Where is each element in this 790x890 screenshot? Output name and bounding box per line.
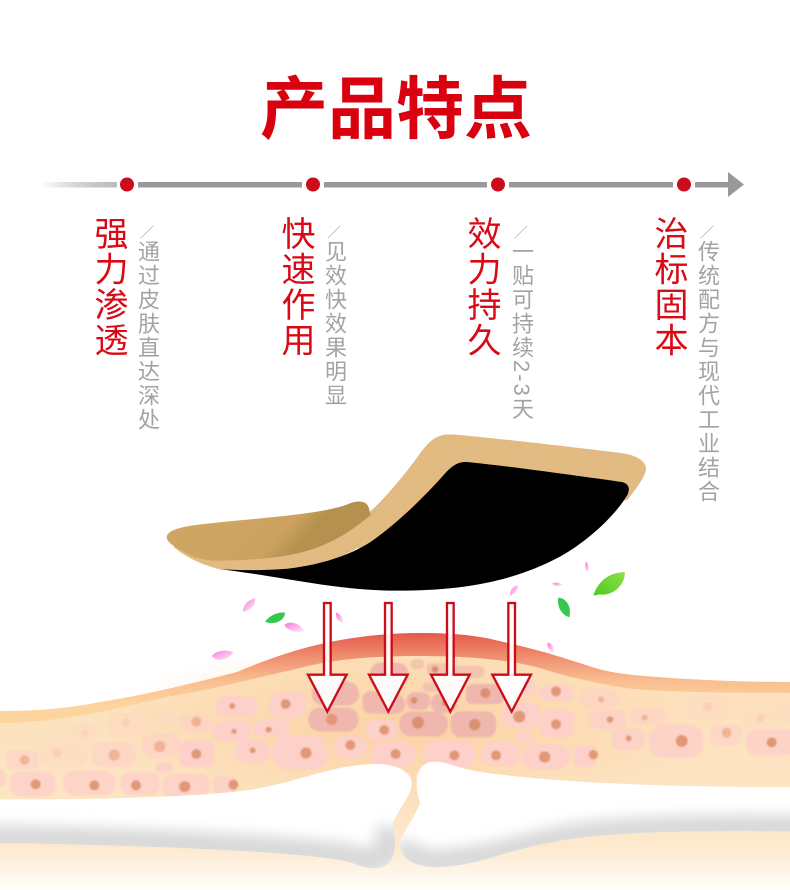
patch backing [173, 434, 646, 571]
medicated patch [167, 434, 646, 591]
skin surface layer [0, 633, 790, 723]
bone, left [0, 760, 417, 873]
arrow 1 [308, 603, 347, 712]
arrow 3 [431, 603, 470, 712]
feature 3 description: ／ 一贴可持续2-3天 [509, 225, 534, 422]
feature 1 heading: 强力渗透 [89, 216, 127, 358]
feature 3 heading: 效力持久 [462, 216, 500, 358]
skin cells, right half [370, 659, 790, 769]
patch folded corner [167, 501, 371, 561]
bone, right [390, 757, 790, 870]
patch black medicine surface [218, 462, 629, 591]
timeline arrow [40, 172, 744, 197]
arrow 2 [369, 603, 408, 712]
arrow 4 [492, 603, 531, 712]
floating petals and leaves [212, 562, 625, 660]
title: 产品特点 [260, 72, 532, 148]
feature 4 description: ／ 传统配方与现代工业结合 [695, 225, 720, 504]
feature 4 heading: 治标固本 [649, 216, 687, 358]
skin cells, left half [0, 682, 403, 799]
feature 2 heading: 快速作用 [276, 216, 314, 358]
four downward red arrows [308, 603, 531, 712]
skin body [0, 649, 790, 890]
feature 1 description: ／ 通过皮肤直达深处 [135, 225, 160, 432]
feature 2 description: ／ 见效快效果明显 [322, 225, 347, 408]
